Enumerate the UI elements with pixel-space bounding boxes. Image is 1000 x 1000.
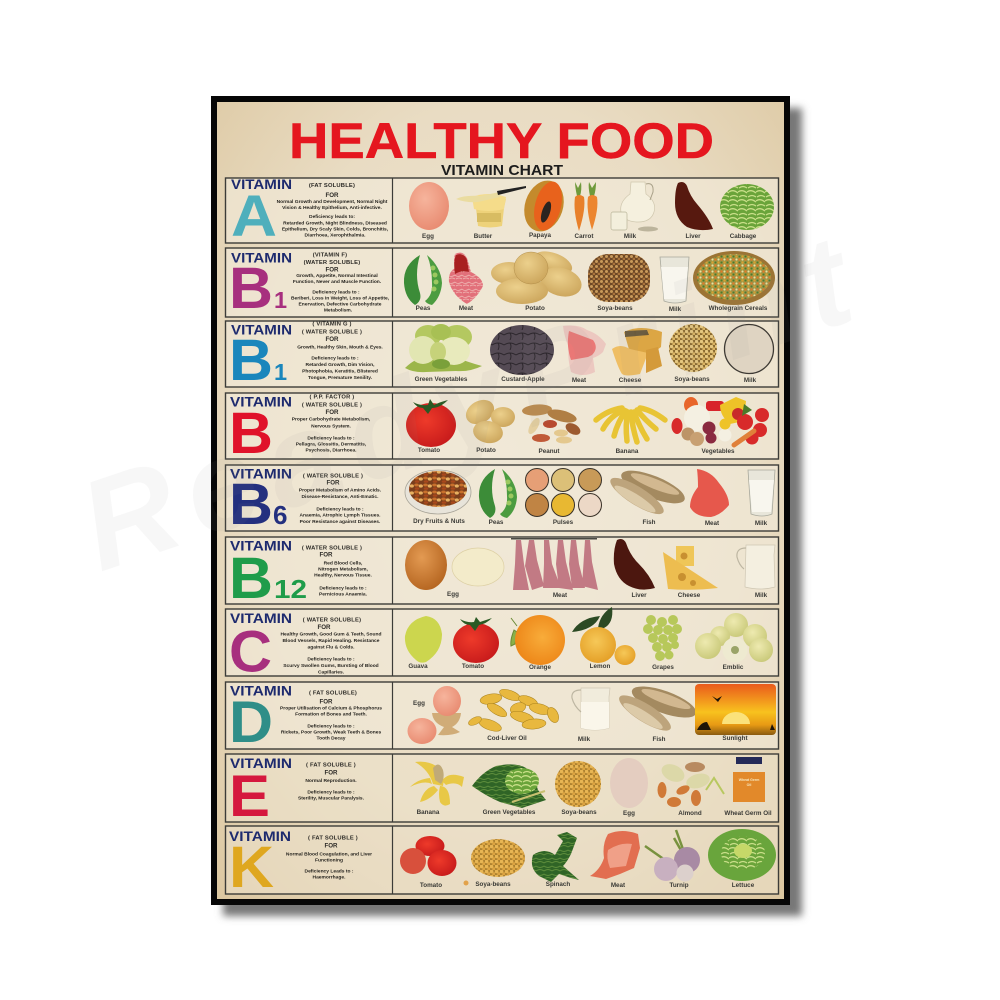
- food: vegetables: Vegetables: [702, 448, 735, 455]
- vitamin C description: ( WATER SOLUBLE): [303, 618, 361, 624]
- vitamin B1 description: (VITAMIN F): [313, 252, 347, 258]
- vitamin B12 description: Nitrogen Metabolism,: [318, 566, 368, 572]
- panel: vitamin B1 (vitamin F): [226, 247, 778, 321]
- title: HEALTHY FOOD: [289, 113, 714, 169]
- vitamin B1 G description: ( WATER SOLUBLE ): [302, 330, 362, 336]
- vitamin B12 description: [229, 538, 372, 611]
- food: soya-beans: Soya-beans: [597, 305, 633, 312]
- food: green vegetables: [472, 764, 546, 816]
- vitamin B1 G description: Retarded Growth, Dim Vision,: [306, 362, 375, 368]
- vitamin B1 G description: [229, 322, 383, 393]
- food: cheese: Cheese: [678, 592, 701, 599]
- food: orange: Orange: [529, 664, 552, 671]
- food: fish: [615, 680, 700, 743]
- food: cheese: [663, 546, 718, 599]
- vitamin C description: Deficiency leads to :: [307, 656, 355, 662]
- vitamin B12 description: 12: [274, 574, 307, 604]
- vitamin B1 description: Metabolism.: [324, 308, 353, 314]
- food: almond: [658, 761, 724, 817]
- vitamin C description: [229, 610, 382, 684]
- vitamin B1 description: Enervation, Defective Carbohydrate: [299, 302, 382, 308]
- food: turnip: [645, 830, 700, 889]
- vitamin A description: FOR: [325, 192, 339, 199]
- food: banana peeled: Banana: [417, 809, 440, 816]
- food: papaya: [518, 175, 570, 239]
- vitamin C description: against Flu & Colds.: [307, 644, 355, 650]
- food: pulses: Pulses: [553, 519, 574, 526]
- vitamin B1 G description: VITAMIN: [231, 322, 292, 338]
- food: wheat germ oil bottle: Oil: [747, 783, 751, 787]
- panel: vitamin B12: [226, 537, 778, 611]
- food: banana: [596, 408, 665, 455]
- vitamin B1 G description: Deficiency leads to :: [311, 356, 359, 362]
- food: tomato: [406, 399, 456, 454]
- vitamin D description: ( FAT SOLUBLE): [309, 690, 357, 696]
- food: tomato: Tomato: [462, 663, 484, 670]
- food: papaya: Papaya: [529, 232, 552, 239]
- food: green vegetables: Green Vegetables: [415, 376, 468, 383]
- food: green vegetables: Green Vegetables: [483, 809, 536, 816]
- food: milk powder dish: Milk: [744, 377, 757, 384]
- food: tomato: Tomato: [420, 882, 442, 889]
- panel: vitamin K: [226, 826, 778, 900]
- vitamin B1 description: 1: [274, 287, 287, 313]
- vitamin B1 description: Growth, Appetite, Normal Intestinal: [296, 273, 378, 279]
- vitamin A description: Epithelium, Dry Scaly Skin, Colds, Bronchitis,: [282, 226, 389, 232]
- vitamin B12 description: Healthy, Nervous Tissue.: [314, 572, 372, 578]
- vitamin C description: Scurvy Swollen Gums, Bursting of Blood: [283, 663, 379, 669]
- food: pulses: [526, 468, 602, 526]
- food: tomato: [400, 836, 456, 889]
- vitamin B1 description: (WATER SOLUBLE): [304, 260, 360, 266]
- vitamin C description: Capillaries.: [318, 670, 345, 676]
- food: milk jug: Milk: [578, 736, 591, 743]
- vitamin B description: B: [229, 401, 273, 466]
- food: guava: [405, 616, 442, 670]
- food: egg: Egg: [447, 591, 459, 598]
- food: milk jug: [572, 688, 610, 743]
- panel: vitamin E: [226, 754, 778, 829]
- food: peas: [404, 255, 442, 312]
- vitamin A description: A: [231, 184, 277, 249]
- food: cheese: Cheese: [619, 377, 642, 384]
- vitamin B1 description: B: [229, 256, 273, 321]
- food: butter: Butter: [474, 233, 493, 240]
- vitamin B1 G description: ( VITAMIN G ): [312, 322, 352, 328]
- food: meat: [590, 831, 640, 889]
- food: soya-beans: [669, 324, 717, 383]
- food: grapes: [643, 615, 682, 671]
- vitamin K description: ( FAT SOLUBLE ): [308, 836, 358, 842]
- vitamin B1 G description: B: [229, 328, 273, 393]
- panel: vitamin A: [226, 175, 778, 249]
- food: soya-beans: [464, 839, 525, 888]
- food: peas: Peas: [489, 519, 504, 526]
- food: milk glass: Milk: [669, 306, 682, 313]
- vitamin D description: D: [229, 690, 273, 755]
- vitamin B6 description: ( WATER SOLUBLE ): [303, 474, 363, 480]
- vitamin B1 G description: Tongue, Premature Senility.: [308, 375, 373, 381]
- vitamin B12 description: B: [229, 546, 273, 611]
- food: liver: Liver: [685, 233, 701, 240]
- food: milk glass: [748, 470, 775, 527]
- food: sunlight: Sunlight: [722, 735, 748, 742]
- vitamin K description: Haemorrhage.: [313, 874, 346, 880]
- panel: vitamin B1 (vitamin G): [226, 321, 778, 393]
- vitamin B1 description: VITAMIN: [231, 250, 292, 266]
- food: carrot: [574, 182, 597, 240]
- vitamin D description: Proper Utilisation of Calcium & Phosphorus: [280, 706, 382, 712]
- food: potato: [491, 247, 585, 312]
- food: custard-apple: [490, 325, 554, 383]
- food: meat: [449, 253, 483, 312]
- food: potato: Potato: [525, 305, 545, 312]
- vitamin K description: K: [229, 835, 274, 900]
- vitamin B12 description: ( WATER SOLUBLE ): [302, 546, 362, 552]
- watermark: ReadyPrint: [64, 208, 872, 599]
- food: dry fruits and nuts: [405, 470, 471, 525]
- vitamin D description: Formation of Bones and Teeth.: [295, 712, 367, 718]
- vitamin E description: E: [229, 764, 270, 829]
- vitamin A description: [231, 176, 389, 249]
- food: spinach: [532, 832, 579, 888]
- food: potato: [462, 395, 515, 454]
- subtitle: VITAMIN CHART: [441, 162, 563, 179]
- food: egg: [405, 540, 504, 598]
- food: peas: Peas: [416, 305, 431, 312]
- panel: vitamin C: [226, 607, 778, 684]
- vitamin B6 description: 6: [273, 500, 287, 530]
- vitamin E description: Deficiency leads to :: [307, 790, 355, 796]
- food: soya-beans: [588, 254, 650, 312]
- vitamin E description: ( FAT SOLUBLE ): [306, 762, 356, 768]
- food: liver: [675, 182, 713, 240]
- vitamin B6 description: [229, 466, 382, 537]
- food: cabbage: Cabbage: [730, 233, 757, 240]
- vitamin E description: Normal Reproduction.: [305, 778, 357, 784]
- poster frame: [211, 96, 790, 905]
- vitamin B6 description: FOR: [326, 480, 340, 486]
- vitamin D description: Tooth Decay: [316, 736, 346, 742]
- food: almond: Almond: [678, 810, 702, 817]
- vitamin K description: Deficiency Leads to :: [305, 868, 354, 874]
- food: meat: [563, 326, 606, 384]
- food: eggs in cup: Egg: [413, 700, 425, 707]
- food: tomato: Tomato: [418, 447, 440, 454]
- food: hanging meat: [511, 538, 598, 599]
- food: sunlight: [695, 684, 776, 742]
- food: banana: Banana: [616, 448, 639, 455]
- food: custard-apple: Custard-Apple: [501, 376, 545, 383]
- vitamin A description: VITAMIN: [231, 176, 292, 192]
- vitamin A description: Retarded Growth, Night Blindness, Diseased: [283, 220, 387, 226]
- vitamin D description: VITAMIN: [230, 682, 292, 698]
- vitamin A description: Diarrhoea, Xerophthalmia.: [305, 232, 366, 238]
- vitamin B description: VITAMIN: [230, 394, 292, 410]
- vitamin A description: Normal Growth and Development, Normal Night: [277, 199, 388, 205]
- food: potato: Potato: [476, 447, 496, 454]
- food: carrot: Carrot: [575, 233, 594, 240]
- food: milk glass: [660, 257, 689, 313]
- food: liver: [614, 539, 655, 599]
- vitamin B1 G description: FOR: [325, 336, 339, 343]
- vitamin B6 description: Proper Metabolism of Amino Acids.: [299, 488, 382, 494]
- food: meat: Meat: [611, 882, 626, 889]
- food: milk jug and glass: Milk: [624, 233, 637, 240]
- vitamin B description: Pellagra, Glossitis, Dermatitis,: [296, 442, 367, 448]
- food: fish: [606, 464, 689, 526]
- food: meat: Meat: [459, 305, 474, 312]
- panel: vitamin B (P.P. factor): [226, 393, 778, 466]
- poster shadow: [223, 108, 802, 916]
- vitamin B12 description: Deficiency leads to :: [319, 586, 367, 592]
- vitamin C description: FOR: [317, 624, 331, 631]
- vitamin B description: FOR: [325, 409, 339, 416]
- vitamin C description: C: [229, 620, 272, 684]
- food: guava: Guava: [408, 663, 428, 670]
- food: liver: Liver: [631, 592, 647, 599]
- food: milk powder dish: [724, 324, 774, 384]
- food: eggs in cup: [408, 686, 461, 744]
- food: egg: [409, 182, 449, 240]
- food: lemon: Lemon: [590, 663, 610, 670]
- food: wholegrain cereals: Wholegrain Cereals: [709, 305, 768, 312]
- food: milk jug and glass: [611, 182, 658, 240]
- vitamin K description: [229, 828, 372, 900]
- vitamin B6 description: Poor Resistance against Diseases.: [300, 519, 381, 525]
- vitamin B12 description: FOR: [319, 552, 333, 558]
- food: emblic: [695, 613, 773, 671]
- food: meat: [690, 469, 729, 527]
- food: turnip: Turnip: [669, 882, 689, 889]
- vitamin C description: VITAMIN: [230, 610, 292, 626]
- food: lemon: [572, 607, 636, 670]
- food: peas: [479, 469, 517, 526]
- vitamin A description: Deficiency leads to:: [309, 214, 355, 220]
- food: green vegetables: [405, 324, 482, 383]
- food: vegetables: [672, 397, 769, 455]
- food: fish: Fish: [653, 736, 666, 743]
- food: cod-liver oil: [467, 687, 561, 742]
- food: cheese: [612, 328, 662, 384]
- food: egg: Egg: [422, 233, 434, 240]
- vitamin D description: FOR: [319, 698, 333, 706]
- food: egg: [610, 758, 648, 817]
- food: soya-beans: Soya-beans: [674, 376, 710, 383]
- vitamin B12 description: VITAMIN: [230, 538, 292, 554]
- vitamin D description: Deficiency leads to :: [307, 724, 355, 730]
- vitamin C description: Healthy Growth, Good Gum & Teeth, Sound: [281, 632, 382, 638]
- food: peanut: Peanut: [538, 448, 560, 455]
- vitamin B6 description: Deficiency leads to :: [316, 506, 364, 512]
- food: butter: [456, 186, 526, 240]
- food: wheat germ oil bottle: Wheat Germ Oil: [724, 810, 772, 817]
- panel: vitamin B6: [226, 464, 778, 537]
- vitamin B description: ( WATER SOLUBLE ): [302, 402, 362, 408]
- vitamin B1 G description: Growth, Healthy Skin, Mouth & Eyes.: [297, 344, 383, 350]
- vitamin E description: Sterility, Muscular Paralysis.: [298, 796, 365, 802]
- vitamin E description: [229, 755, 365, 829]
- food: milk jug: [737, 545, 775, 599]
- food: spinach: Spinach: [546, 881, 570, 888]
- food: wheat germ oil bottle: Wheat Germ: [739, 778, 759, 782]
- vitamin K description: Normal Blood Coagulation, and Liver: [286, 852, 372, 858]
- vitamin B6 description: B: [229, 472, 273, 537]
- vitamin C description: Blood Vessels, Rapid Healing. Resistance: [282, 638, 380, 644]
- vitamin E description: VITAMIN: [230, 755, 292, 771]
- vitamin B1 G description: 1: [274, 359, 287, 385]
- vitamin B description: Psychosis, Diarrhoea.: [305, 448, 357, 454]
- food: lettuce: Lettuce: [732, 882, 755, 889]
- vitamin B1 description: FOR: [325, 266, 339, 274]
- vitamin D description: Rickets, Poor Growth, Weak Teeth & Bones: [281, 730, 381, 736]
- vitamin B6 description: Disease-Resistance, Anti-Ematic.: [301, 494, 379, 500]
- food: wholegrain cereals: [693, 251, 775, 312]
- food: soya-beans: Soya-beans: [561, 809, 597, 816]
- vitamin B1 description: [229, 250, 390, 321]
- vitamin B12 description: Pernicious Anaemia.: [319, 592, 368, 598]
- food: tomato: [453, 617, 499, 670]
- food: orange: [511, 615, 565, 671]
- vitamin E description: FOR: [324, 770, 338, 776]
- vitamin A description: (FAT SOLUBLE): [309, 183, 355, 189]
- vitamin B description: Nervous System.: [311, 424, 351, 430]
- food: hanging meat: Meat: [553, 592, 568, 599]
- panel: vitamin D: [226, 680, 778, 755]
- vitamin B1 description: Function, Never and Muscle Function.: [293, 279, 382, 285]
- vitamin B description: ( P.P. FACTOR ): [310, 394, 354, 400]
- vitamin B1 G description: Photophobia, Keratitis, Blistered: [302, 368, 378, 374]
- vitamin A description: Vision & Healthy Epithelium, Anti-infective.: [282, 205, 383, 211]
- vitamin B description: Deficiency leads to :: [307, 436, 355, 442]
- food: emblic: Emblic: [723, 664, 744, 671]
- vitamin K description: VITAMIN: [229, 828, 291, 844]
- food: dry fruits and nuts: Dry Fruits & Nuts: [413, 518, 465, 525]
- food: grapes: Grapes: [652, 664, 674, 671]
- vitamin D description: [229, 682, 382, 755]
- vitamin B description: [229, 394, 371, 466]
- food: soya-beans: [555, 761, 601, 816]
- food: wheat germ oil bottle: [724, 757, 772, 817]
- vitamin B1 description: Beriberi, Loss in Weight, Loss of Appetite,: [291, 296, 390, 302]
- food: peanut: [522, 403, 582, 455]
- poster paper: [217, 102, 784, 899]
- food: milk glass: Milk: [755, 520, 768, 527]
- food: soya-beans: Soya-beans: [475, 881, 511, 888]
- vitamin K description: Functioning: [315, 858, 343, 864]
- vitamin B12 description: Red Blood Cells,: [324, 560, 363, 566]
- food: meat: Meat: [572, 377, 587, 384]
- food: meat: Meat: [705, 520, 720, 527]
- food: fish: Fish: [643, 519, 656, 526]
- food: milk jug: Milk: [755, 592, 768, 599]
- food: lettuce: [708, 829, 776, 889]
- food: egg: Egg: [623, 810, 635, 817]
- food: cod-liver oil: Cod-Liver Oil: [487, 735, 527, 742]
- vitamin B6 description: VITAMIN: [230, 466, 292, 482]
- vitamin B description: Proper Carbohydrate Metabolism,: [292, 416, 371, 422]
- food: banana peeled: [410, 762, 464, 816]
- vitamin K description: FOR: [324, 842, 338, 850]
- vitamin B1 description: Deficiency leads to :: [312, 290, 360, 296]
- vitamin B6 description: Anaemia, Atrophic Lymph Tissues.: [299, 512, 381, 518]
- food: cabbage: [720, 184, 774, 240]
